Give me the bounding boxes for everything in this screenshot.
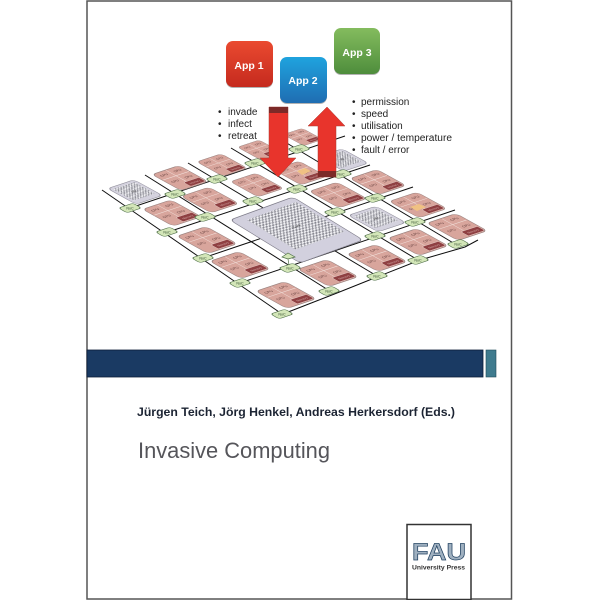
tile grid: back rows [108,128,487,308]
highlighted cores [297,168,426,211]
app 3 box [334,28,380,75]
arrow: down from apps to hardware [260,107,296,177]
monitoring list: permission [361,97,409,108]
central processor tile [230,197,363,263]
monitoring list: fault / error [361,145,410,156]
arrow: up from hardware to apps [308,107,345,177]
invade list: retreat [228,131,257,142]
monitoring list: • [352,121,356,132]
invade list: • [218,119,222,130]
monitoring list: speed [361,109,388,120]
multi-tile architecture diagram [102,128,487,319]
monitoring list: • [352,109,356,120]
app 1 box [226,41,273,88]
app 1 box: App 1 [234,60,264,72]
cover border [87,1,512,599]
publisher logo box [407,524,471,600]
invade list: invade [228,107,258,118]
monitoring list: • [352,145,356,156]
invade list: infect [228,119,252,130]
app 2 box: App 2 [288,75,318,87]
University Press label: University Press [412,564,465,572]
monitoring list: • [352,97,356,108]
monitoring list: • [352,133,356,144]
interconnect lines [102,133,478,314]
title: Invasive Computing [138,438,330,463]
invade list: • [218,107,222,118]
app 3 box: App 3 [342,47,372,59]
router nodes [119,144,469,319]
teal banner block [486,350,496,377]
monitoring list: power / temperature [361,133,452,144]
FAU wordmark: FAU [412,539,466,566]
central processor tile: i-Core [290,224,302,229]
invade list: • [218,131,222,142]
monitoring list: utilisation [361,121,403,132]
invade list [218,107,258,142]
navy banner [87,350,483,377]
authors: Jürgen Teich, Jörg Henkel, Andreas Herkersdorf (Eds.) [137,406,455,419]
monitoring list [352,97,452,156]
app 2 box [280,57,327,104]
